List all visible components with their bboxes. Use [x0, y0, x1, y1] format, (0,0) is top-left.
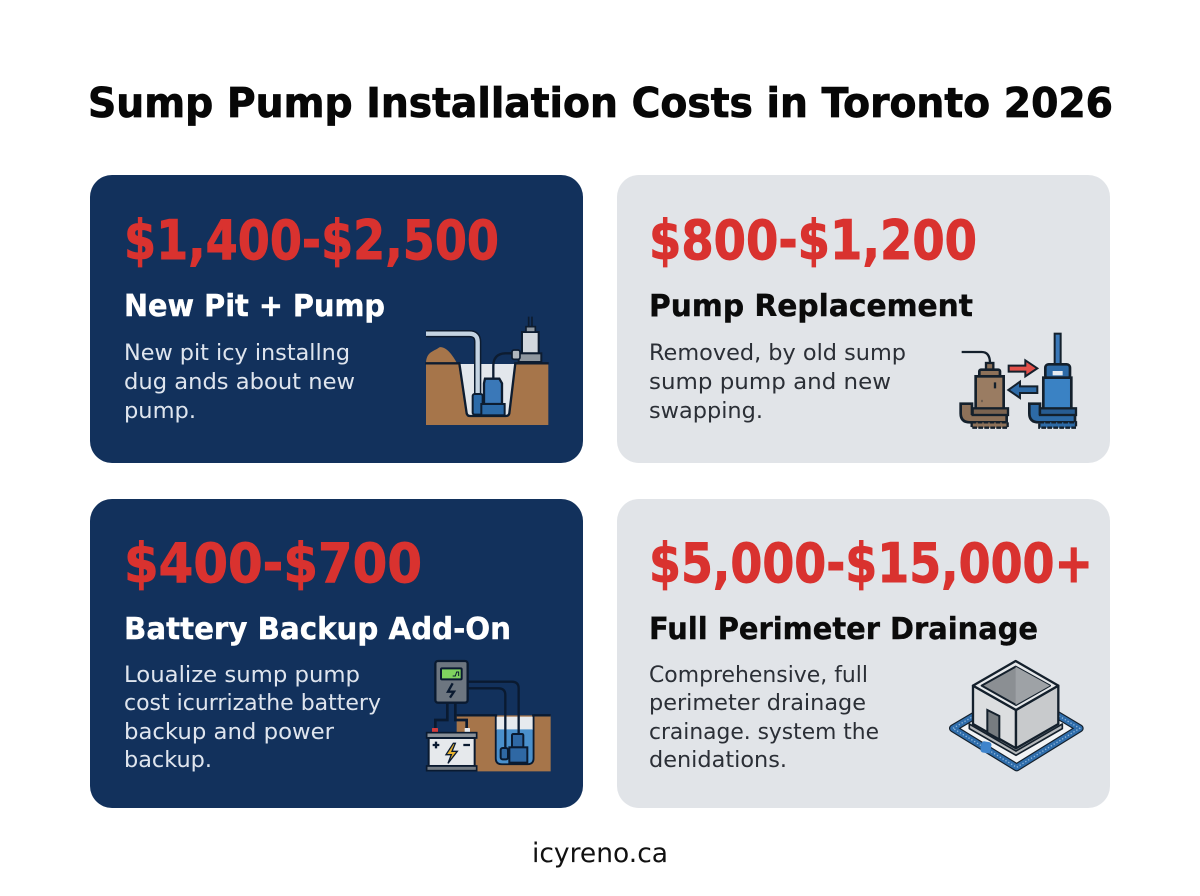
description: new pit + pump: New pit icy installng: [124, 340, 350, 366]
icon: battery backup system: [427, 661, 551, 771]
description: new pit + pump: dug ands about new: [124, 369, 355, 395]
heading: battery backup: Battery Backup Add-On: [124, 612, 511, 647]
panel: full perimeter drainage: [617, 499, 1110, 808]
heading: full perimeter drainage: Full Perimeter Drainage: [649, 612, 1038, 647]
price: full perimeter drainage: $5,000-$15,000+: [649, 532, 1093, 595]
description: full perimeter drainage: crainage. system the: [649, 719, 879, 745]
description: new pit + pump: [124, 340, 355, 424]
footer: website: icyreno.ca: [532, 838, 668, 869]
icon: old and new pump swap: [961, 334, 1076, 428]
description: full perimeter drainage: Comprehensive, full: [649, 662, 868, 688]
description: battery backup: cost icurrizathe battery: [124, 690, 381, 716]
description: full perimeter drainage: perimeter drainage: [649, 690, 866, 716]
description: new pit + pump: pump.: [124, 398, 196, 424]
description: full perimeter drainage: denidations.: [649, 747, 787, 773]
description: battery backup: backup.: [124, 747, 212, 773]
description: pump replacement: swapping.: [649, 398, 763, 424]
title: Sump Pump Installation Costs in Toronto 2026: [88, 79, 1113, 127]
price: pump replacement: $800-$1,200: [649, 209, 977, 272]
price: new pit + pump: $1,400-$2,500: [124, 209, 499, 272]
icon: house with perimeter drain: [953, 661, 1080, 767]
description: full perimeter drainage: [649, 662, 879, 773]
panel: battery backup add-on: [90, 499, 583, 808]
panel: new pit + pump: [90, 175, 583, 463]
description: pump replacement: [649, 340, 906, 424]
description: battery backup: backup and power: [124, 719, 335, 745]
description: pump replacement: Removed, by old sump: [649, 340, 906, 366]
description: pump replacement: sump pump and new: [649, 369, 891, 395]
icon: new sump pit with pump: [425, 317, 549, 425]
panel: pump replacement: [617, 175, 1110, 463]
heading: new pit + pump: New Pit + Pump: [124, 289, 385, 324]
heading: pump replacement: Pump Replacement: [649, 289, 973, 324]
description: battery backup: Loualize sump pump: [124, 662, 360, 688]
price: battery backup: $400-$700: [124, 532, 422, 595]
description: battery backup: [124, 662, 381, 773]
